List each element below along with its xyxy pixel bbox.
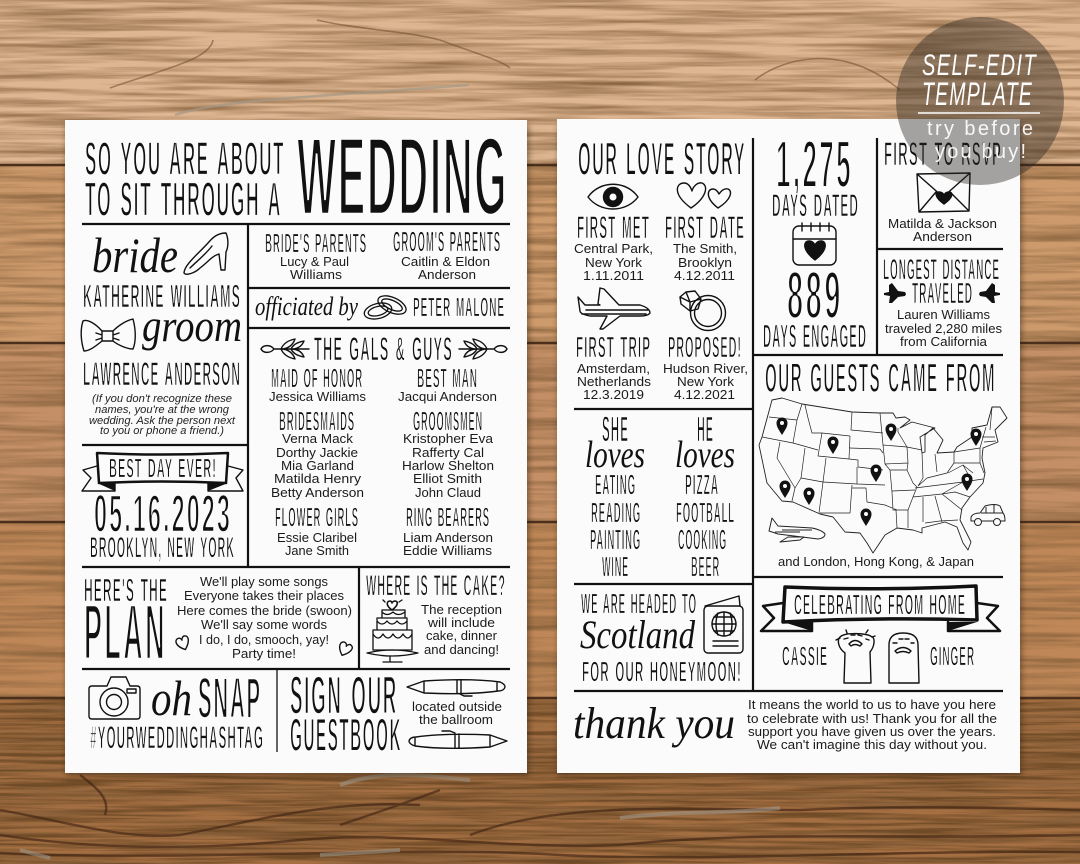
proposed: New York: [677, 374, 735, 389]
panel: thank you: thank you: [573, 699, 735, 748]
cake text: [421, 602, 502, 657]
panel: here's the plan: PLAN: [84, 588, 167, 677]
guestbook location text: located outside: [412, 699, 502, 714]
panel: she loves and he loves: PAINTING: [590, 525, 641, 557]
he loves column: [675, 409, 735, 584]
panel: sign our guestbook: [290, 664, 507, 761]
icon: left plane: [884, 283, 906, 303]
panel: right card: PROPOSED!: [668, 330, 742, 365]
proposed: Hudson River,: [663, 361, 748, 376]
panel: here's the plan: HERE'S THE: [84, 572, 168, 609]
first trip: [576, 330, 652, 402]
bridesmaids: Betty Anderson: [271, 485, 364, 500]
panel: longest distance: from California: [900, 334, 988, 349]
icon: map pins: [776, 418, 982, 526]
panel: right card: DAYS ENGAGED: [763, 318, 867, 355]
icon: camera: [89, 677, 140, 719]
first date: 4.12.2011: [674, 268, 735, 283]
panel: first to rsvp: Anderson: [913, 229, 972, 244]
plan text: [177, 574, 352, 661]
best man: Jacqui Anderson: [398, 389, 497, 404]
panel: the gals and guys: BRIDESMAIDS: [279, 406, 355, 437]
panel: she loves and he loves: EATING: [595, 470, 636, 502]
first date: [665, 210, 745, 283]
icon: left laurel: [261, 339, 309, 359]
panel: first to rsvp: Matilda & Jackson: [888, 216, 997, 231]
icon: diamond ring: [680, 291, 726, 330]
he loves column: PIZZA: [685, 470, 719, 502]
first date: Brooklyn: [678, 255, 732, 270]
panel: sign our guestbook: SIGN OUR: [290, 664, 398, 726]
panel: celebrating from home: CASSIE: [782, 641, 828, 672]
groomsmen: Elliot Smith: [413, 471, 482, 486]
bridesmaids: Mia Garland: [281, 458, 354, 473]
icon: passport: [704, 596, 743, 653]
icon: high heel shoe: [184, 233, 228, 274]
panel: right card: OUR LOVE STORY: [578, 132, 746, 185]
first met: 1.11.2011: [583, 268, 644, 283]
panel: first to rsvp: [884, 136, 1002, 244]
icon: calendar heart: [793, 223, 836, 265]
guestbook location text: [412, 699, 502, 727]
panel: right card: FOOTBALL: [676, 498, 735, 530]
icon: left heart: [175, 635, 191, 652]
panel: where is the cake: [366, 570, 506, 662]
groomsmen: Kristopher Eva: [403, 431, 494, 446]
panel: she loves and he loves: READING: [591, 498, 641, 530]
first trip: 12.3.2019: [583, 387, 644, 402]
cake text: will include: [427, 615, 495, 630]
flower girls: Jane Smith: [285, 543, 349, 558]
icon: envelope: [917, 173, 970, 212]
she loves column: [585, 409, 645, 584]
first met: New York: [585, 255, 643, 270]
maid of honor: [269, 363, 367, 404]
panel: right card: BEER: [691, 552, 720, 584]
card shadows: [66, 124, 1022, 776]
panel: parents: [265, 227, 501, 282]
panel: thank you: [573, 697, 997, 752]
she loves column: loves: [585, 434, 645, 476]
plan text: We'll play some songs: [200, 574, 328, 589]
panel: right card: FOR OUR HONEYMOON!: [582, 657, 742, 689]
thank you message: It means the world to us to have you here: [748, 697, 996, 712]
groomsmen: Rafferty Cal: [412, 445, 484, 460]
title: SO YOU ARE ABOUT: [85, 133, 285, 186]
icon: right heart: [336, 641, 353, 658]
icon: car: [971, 504, 1005, 526]
map caption: and London, Hong Kong, & Japan: [778, 554, 974, 569]
panel: the gals and guys: MAID OF HONOR: [271, 363, 363, 394]
panel: she loves and he loves: WINE: [602, 552, 629, 584]
panel: our guests came from: [759, 354, 1007, 569]
icon: right laurel: [459, 339, 507, 359]
thank you message: support you have given us over the years.: [748, 724, 996, 739]
thank you message: [747, 697, 997, 752]
ring bearers: [403, 502, 493, 558]
panel: oh snap: [89, 666, 264, 756]
thank you message: We can't imagine this day without you.: [757, 737, 987, 752]
chart: US map: [759, 398, 1007, 553]
groom script: groom: [142, 300, 242, 351]
title: [85, 114, 508, 239]
thank you message: to celebrate with us! Thank you for all the: [747, 711, 997, 726]
panel: left card: #YOURWEDDINGHASHTAG: [90, 720, 264, 756]
he loves column: loves: [675, 434, 735, 476]
icon: wedding cake: [367, 600, 418, 662]
text: PETER MALONE: [413, 292, 505, 323]
panel: right card: 1,275: [776, 126, 853, 202]
right card dividers: [574, 138, 1003, 691]
proposed: [663, 330, 748, 402]
first met: Central Park,: [574, 241, 653, 256]
panel: the gals and guys: THE GALS & GUYS: [314, 331, 453, 369]
icon: two hearts: [677, 183, 731, 208]
oh script: oh: [151, 670, 192, 726]
panel: parents: Williams: [290, 267, 343, 282]
title: TO SIT THROUGH A: [85, 173, 282, 227]
guestbook location text: the ballroom: [419, 712, 493, 727]
panel: celebrating from home: [761, 586, 1000, 683]
banner: celebrating from home: [761, 586, 1000, 631]
left card dividers: [82, 224, 510, 669]
she loves column: SHE: [602, 409, 629, 450]
panel: right card: COOKING: [678, 525, 727, 557]
panel: longest distance: Lauren Williams: [897, 307, 990, 322]
plan text: Here comes the bride (swoon): [177, 603, 352, 618]
note text: [89, 393, 236, 437]
groomsmen: Harlow Shelton: [402, 458, 494, 473]
note text: wedding. Ask the person next: [89, 415, 236, 427]
panel: sign our guestbook: GUESTBOOK: [290, 708, 402, 761]
first trip: Amsterdam,: [577, 361, 650, 376]
bridesmaids: Dorthy Jackie: [276, 445, 358, 460]
panel: our love story: [574, 132, 748, 402]
ring bearers: Liam Anderson: [403, 530, 493, 545]
panel: left card: [65, 114, 527, 773]
panel: left card: BROOKLYN, NEW YORK: [90, 532, 235, 565]
panel: bride and groom: [81, 227, 242, 437]
panel: left card: BEST DAY EVER!: [109, 453, 217, 484]
first trip: Netherlands: [577, 374, 652, 389]
text: WEDDING: [297, 114, 508, 239]
plan text: Everyone takes their places: [184, 588, 344, 603]
panel: the gals and guys: [261, 331, 507, 558]
plan text: Party time!: [232, 646, 296, 661]
maid of honor: Jessica Williams: [269, 389, 367, 404]
panel: our love story: FIRST MET: [577, 210, 650, 246]
cake text: The reception: [421, 602, 502, 617]
bridesmaids: Verna Mack: [282, 431, 354, 446]
banner: best day ever: [82, 453, 243, 491]
icon: small airplane: [769, 518, 825, 542]
panel: the gals and guys: BEST MAN: [417, 363, 478, 394]
note text: to you or phone a friend.): [100, 425, 224, 437]
panel: right card: WE ARE HEADED TO: [581, 589, 697, 621]
panel: she loves and he loves: [585, 409, 735, 584]
panel: left card: SNAP: [198, 666, 262, 731]
icon: bow tie: [81, 319, 135, 351]
plan text: We'll say some words: [201, 617, 327, 632]
badge: self-edit template: you buy!: [935, 141, 1026, 163]
flower girls: [275, 502, 359, 558]
icon: eye: [588, 184, 638, 209]
first met: [574, 210, 653, 283]
panel: officiant: [255, 292, 505, 323]
panel: right card: FIRST DATE: [665, 210, 745, 246]
badge: self-edit template: [896, 17, 1064, 185]
proposed: 4.12.2021: [674, 387, 735, 402]
cake text: and dancing!: [424, 642, 499, 657]
bridesmaids: [271, 406, 364, 500]
ring bearers: Eddie Williams: [403, 543, 493, 558]
cake text: cake, dinner: [426, 628, 498, 643]
panel: parents: BRIDE'S PARENTS: [265, 228, 367, 259]
flower girls: Essie Claribel: [277, 530, 357, 545]
panel: days counter: [763, 126, 867, 355]
icon: right plane: [979, 283, 1000, 303]
panel: left card: LAWRENCE ANDERSON: [83, 356, 241, 394]
icon: cat paw: [889, 633, 919, 683]
groomsmen: John Claud: [415, 485, 481, 500]
icon: airplane: [578, 288, 650, 329]
panel: officiant: officiated by: [255, 292, 358, 321]
panel: the gals and guys: FLOWER GIRLS: [275, 502, 359, 533]
best man: [398, 363, 497, 404]
panel: right card: DAYS DATED: [772, 188, 859, 224]
he loves column: HE: [697, 409, 714, 450]
panel: parents: Lucy & Paul: [280, 254, 349, 269]
icon: bottom pen: [409, 731, 507, 748]
text: GROOM'S PARENTS: [393, 227, 501, 259]
panel: parents: Anderson: [418, 267, 476, 282]
note text: (If you don't recognize these: [92, 393, 232, 405]
badge: self-edit template: try before: [927, 118, 1033, 140]
panel: longest distance: [883, 254, 1002, 349]
text: RING BEARERS: [406, 502, 490, 533]
panel: parents: Caitlin & Eldon: [401, 254, 490, 269]
first date: The Smith,: [673, 241, 737, 256]
panel: date: [82, 453, 243, 565]
panel: left card: GROOMSMEN: [413, 406, 483, 437]
panel: left card: 05.16.2023: [94, 484, 232, 544]
plan text: I do, I do, smooch, yay!: [199, 632, 329, 647]
note text: names, you're at the wrong: [95, 404, 230, 416]
icon: wedding rings: [363, 292, 409, 322]
panel: left card: KATHERINE WILLIAMS: [83, 278, 241, 315]
panel: celebrating from home: GINGER: [930, 641, 975, 672]
panel: days counter: 889: [787, 257, 843, 333]
panel: our love story: FIRST TRIP: [576, 330, 651, 365]
groomsmen: [402, 406, 494, 500]
icon: top pen: [407, 680, 505, 696]
bridesmaids: Matilda Henry: [274, 471, 362, 486]
icon: cat paw with claws: [836, 630, 875, 683]
panel: honeymoon: [580, 589, 743, 689]
panel: right card: [557, 119, 1020, 773]
text: WHERE IS THE CAKE?: [366, 570, 506, 603]
panel: honeymoon: Scotland: [580, 612, 696, 657]
bride script: bride: [92, 227, 178, 283]
panel: longest distance: traveled 2,280 miles: [885, 321, 1002, 336]
